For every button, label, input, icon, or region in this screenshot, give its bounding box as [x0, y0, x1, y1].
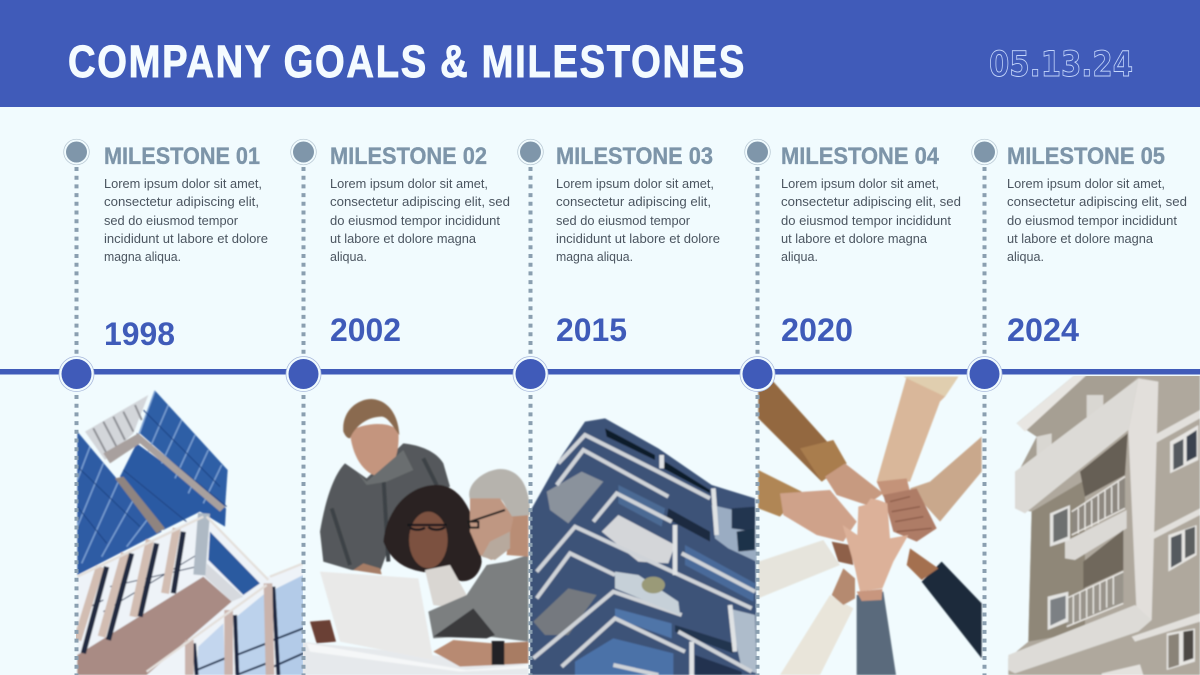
- heading 05: MILESTONE 05: [1007, 143, 1165, 170]
- body 01: magna aliqua.: [104, 250, 181, 264]
- marker 04: [745, 139, 770, 165]
- node 02: [286, 356, 321, 392]
- body 05: do eiusmod tempor incididunt: [1007, 214, 1178, 228]
- heading 04: MILESTONE 04: [781, 143, 939, 170]
- photo: modern apartment tower: [530, 418, 757, 675]
- heading 02: MILESTONE 02: [330, 143, 487, 170]
- title: COMPANY GOALS & MILESTONES: [68, 36, 746, 87]
- body 01: sed do eiusmod tempor: [104, 214, 238, 228]
- marker 01: [64, 139, 89, 165]
- body 04: [781, 177, 961, 264]
- body 05: [1007, 177, 1187, 264]
- timeline axis: [0, 369, 1200, 374]
- body 02: Lorem ipsum dolor sit amet,: [330, 177, 488, 191]
- body 02: consectetur adipiscing elit, sed: [330, 195, 510, 209]
- date: 05.13.24: [989, 45, 1133, 85]
- year 2002: 2002: [330, 312, 401, 348]
- marker 05: [972, 139, 997, 165]
- body 03: Lorem ipsum dolor sit amet,: [556, 177, 714, 191]
- body 03: consectetur adipiscing elit,: [556, 195, 711, 209]
- node 05: [967, 356, 1002, 392]
- node 01: [59, 356, 94, 392]
- body 02: ut labore et dolore magna: [330, 232, 476, 246]
- body 02: aliqua.: [330, 250, 367, 264]
- body 02: [330, 177, 510, 264]
- photo: team hands stacked together: [758, 377, 982, 675]
- heading 01: MILESTONE 01: [104, 143, 260, 170]
- body 01: incididunt ut labore et dolore: [104, 232, 268, 246]
- milestone 04: [740, 139, 961, 392]
- body 04: ut labore et dolore magna: [781, 232, 927, 246]
- body 05: consectetur adipiscing elit, sed: [1007, 195, 1187, 209]
- body 01: Lorem ipsum dolor sit amet,: [104, 177, 262, 191]
- body 05: Lorem ipsum dolor sit amet,: [1007, 177, 1165, 191]
- photo: apartment building with balconies: [1008, 375, 1200, 675]
- node 04: [740, 356, 775, 392]
- milestone 02: [286, 139, 510, 392]
- dotted connectors: [76, 167, 984, 675]
- body 03: incididunt ut labore et dolore: [556, 232, 720, 246]
- body 03: magna aliqua.: [556, 250, 633, 264]
- body 03: sed do eiusmod tempor: [556, 214, 690, 228]
- node 03: [513, 356, 548, 392]
- body 04: Lorem ipsum dolor sit amet,: [781, 177, 939, 191]
- body 03: [556, 177, 720, 264]
- body 04: aliqua.: [781, 250, 818, 264]
- body 02: do eiusmod tempor incididunt: [330, 214, 501, 228]
- marker 02: [291, 139, 316, 165]
- year 2020: 2020: [781, 312, 853, 348]
- header band: [0, 0, 1200, 107]
- marker 03: [518, 139, 543, 165]
- milestone 03: [513, 139, 720, 392]
- body 05: aliqua.: [1007, 250, 1044, 264]
- photo: three colleagues at a laptop: [300, 399, 530, 675]
- year 2015: 2015: [556, 312, 627, 348]
- heading 03: MILESTONE 03: [556, 143, 713, 170]
- body 04: do eiusmod tempor incididunt: [781, 214, 952, 228]
- body 01: [104, 177, 268, 264]
- milestone 01: [59, 139, 268, 392]
- year 1998: 1998: [104, 316, 175, 352]
- milestone 05: [967, 139, 1187, 392]
- year 2024: 2024: [1007, 312, 1079, 348]
- body 05: ut labore et dolore magna: [1007, 232, 1153, 246]
- body 01: consectetur adipiscing elit,: [104, 195, 259, 209]
- body 04: consectetur adipiscing elit, sed: [781, 195, 961, 209]
- photo: glass office tower: [77, 391, 303, 675]
